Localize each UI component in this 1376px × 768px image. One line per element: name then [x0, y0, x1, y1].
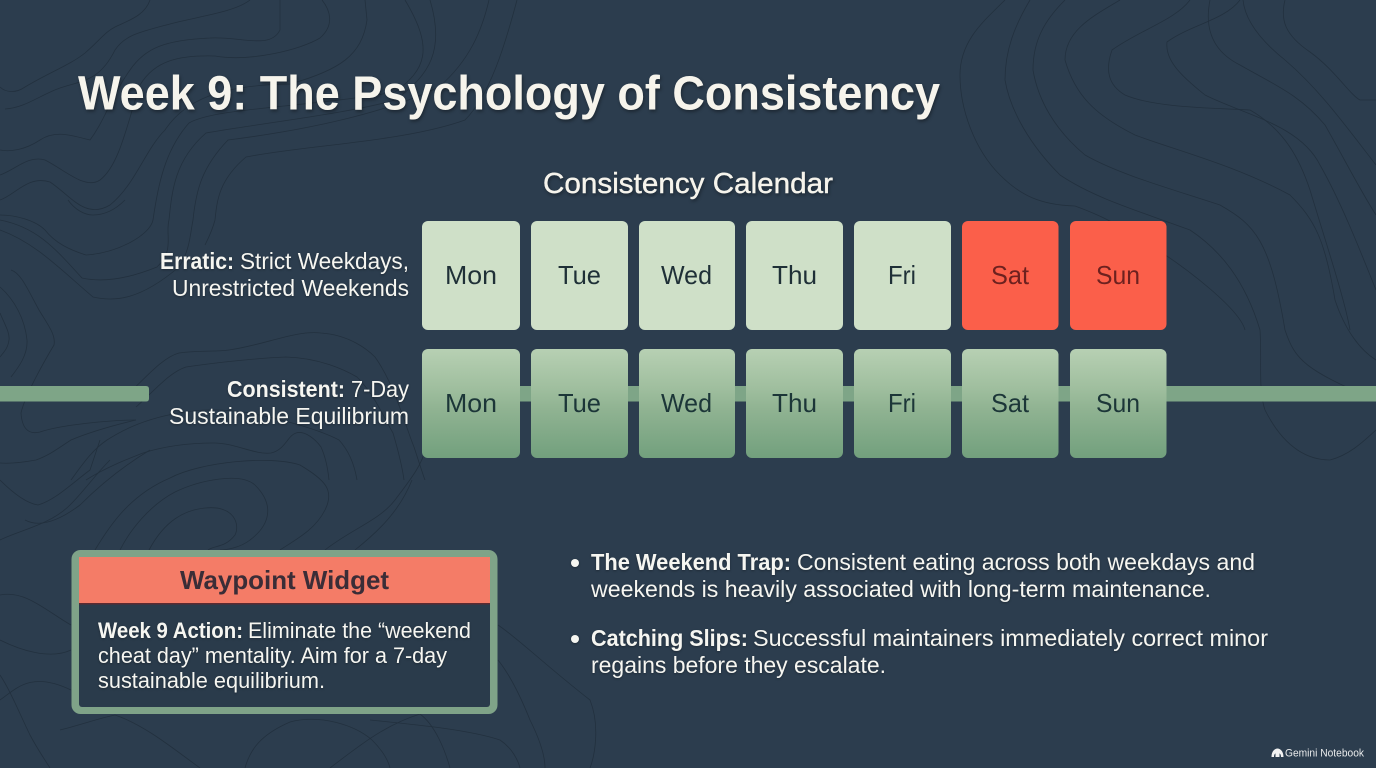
- bullet: the weekend trap: The Weekend Trap:: [591, 549, 791, 575]
- row: erratic calendar: Sat: [991, 260, 1030, 290]
- widget header: Waypoint Widget: [180, 565, 389, 595]
- row label: erratic: [160, 248, 409, 301]
- title: Week 9: The Psychology of Consistency: [78, 68, 940, 120]
- panel: waypoint widget: [72, 550, 498, 714]
- row label: consistent: [169, 376, 409, 429]
- bullet: the weekend trap: Consistent eating across both weekdays and: [797, 549, 1255, 575]
- row label: erratic: Unrestricted Weekends: [172, 275, 409, 301]
- row: erratic calendar: Sun: [1096, 260, 1140, 290]
- widget body text: [98, 618, 471, 693]
- row label: erratic: Erratic:: [160, 248, 234, 274]
- icon: dome: [1272, 748, 1284, 757]
- row: consistent calendar: [422, 349, 1166, 458]
- row: consistent calendar: Wed: [661, 388, 712, 418]
- widget body text: Week 9 Action:: [98, 618, 243, 643]
- row label: consistent: 7-Day: [351, 376, 409, 402]
- row: consistent calendar: Thu: [772, 388, 817, 418]
- watermark: gemini notebook: Gemini Notebook: [1285, 748, 1364, 760]
- row: consistent calendar: Fri: [888, 388, 916, 418]
- bullet: the weekend trap: [571, 549, 1255, 602]
- row: erratic calendar: Tue: [558, 260, 601, 290]
- row label: consistent: Sustainable Equilibrium: [169, 403, 409, 429]
- row label: erratic: Strict Weekdays,: [240, 248, 409, 274]
- bullet: catching slips: [571, 625, 1268, 678]
- row: consistent calendar: Sun: [1096, 388, 1140, 418]
- widget header: [79, 557, 490, 604]
- row: erratic calendar: [422, 221, 1166, 330]
- row: erratic calendar: Fri: [888, 260, 916, 290]
- widget body text: cheat day” mentality. Aim for a 7-day: [98, 643, 448, 668]
- row: erratic calendar: Mon: [445, 260, 497, 290]
- widget body text: Eliminate the “weekend: [248, 618, 471, 643]
- row label: consistent: Consistent:: [227, 376, 345, 402]
- row: consistent calendar: Mon: [445, 388, 497, 418]
- consistency trail band: [0, 386, 1376, 402]
- bullet: the weekend trap: weekends is heavily associated with long-term maintenance.: [590, 576, 1211, 602]
- row: consistent calendar: Tue: [558, 388, 601, 418]
- bullet: catching slips: regains before they escalate.: [591, 652, 886, 678]
- row: erratic calendar: Thu: [772, 260, 817, 290]
- row: consistent calendar: Sat: [991, 388, 1030, 418]
- heading: consistency calendar: Consistency Calendar: [543, 168, 833, 200]
- bullet: catching slips: Catching Slips:: [591, 625, 748, 651]
- bullet: catching slips: Successful maintainers immediately correct minor: [753, 625, 1268, 651]
- widget body text: sustainable equilibrium.: [98, 668, 325, 693]
- row: erratic calendar: Wed: [661, 260, 712, 290]
